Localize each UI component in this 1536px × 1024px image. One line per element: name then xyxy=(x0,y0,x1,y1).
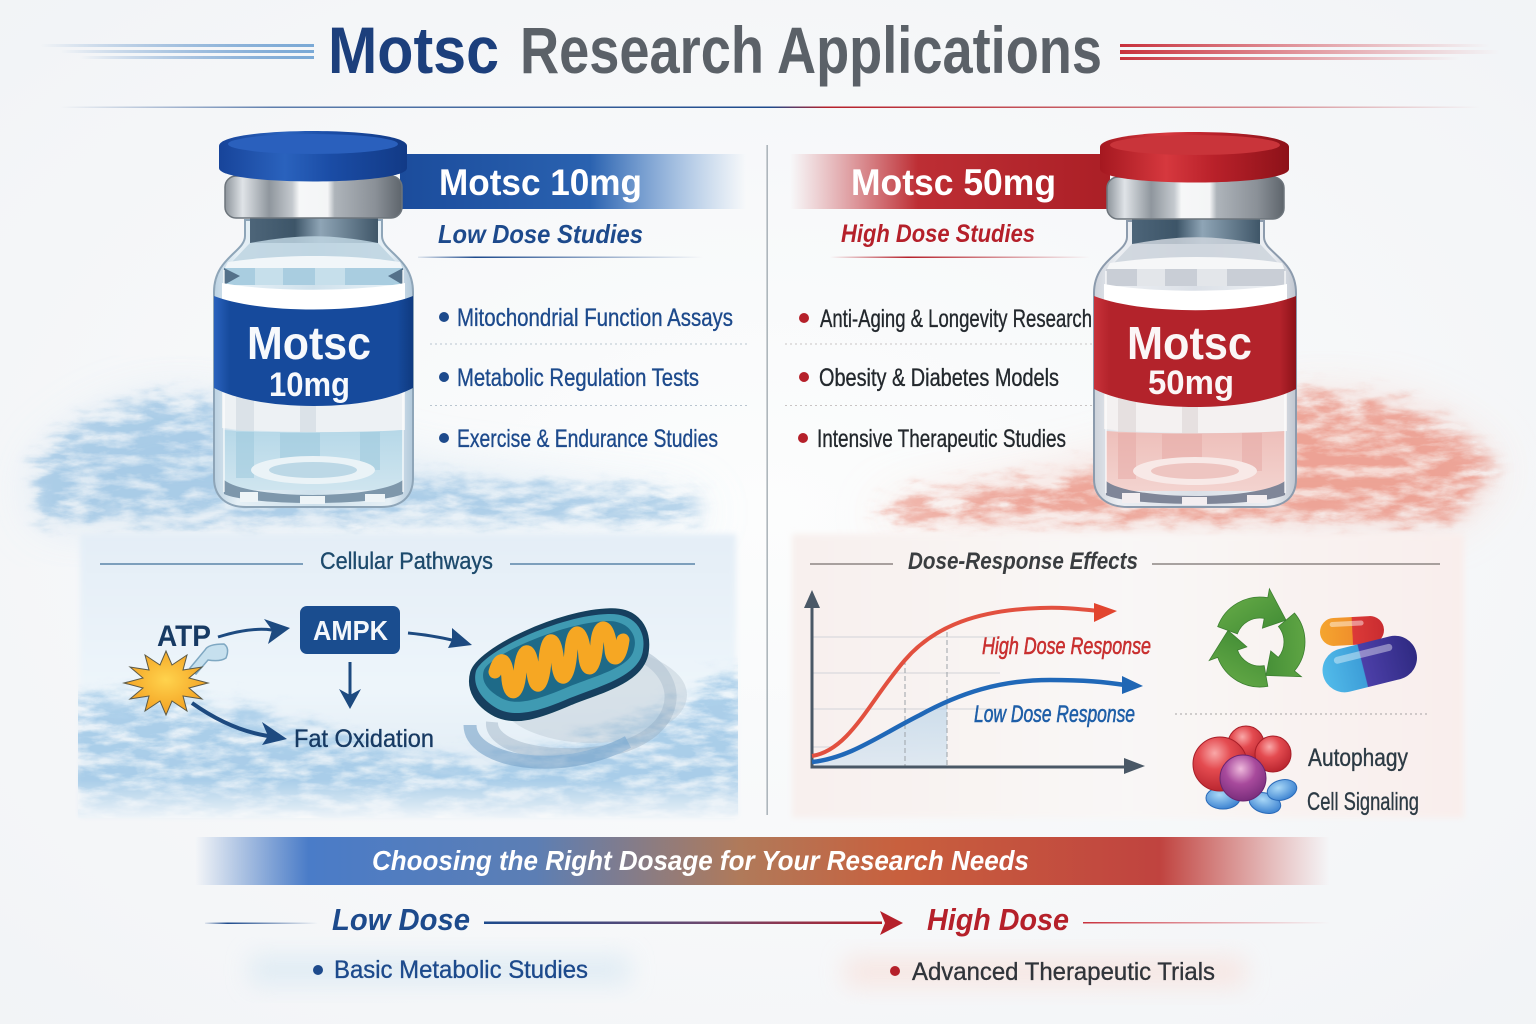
list: high dose studies: Obesity & Diabetes Models xyxy=(819,364,1059,392)
label: high dose response: High Dose Response xyxy=(982,633,1151,660)
chart: dose response curves xyxy=(804,590,1151,774)
vial: 50mg xyxy=(1094,132,1296,507)
heading: dose-response effects: Dose-Response Effects xyxy=(908,548,1138,575)
subheading: high dose: High Dose Studies xyxy=(841,220,1035,248)
axes xyxy=(804,590,1145,774)
vial glass body xyxy=(1094,221,1296,507)
vial: 10mg xyxy=(214,131,413,507)
collar xyxy=(225,176,402,218)
vial label xyxy=(214,296,413,406)
arrow: AMPK to fat oxidation xyxy=(339,662,361,709)
soft wash: red xyxy=(880,400,1495,520)
arrow: ATP to AMPK xyxy=(218,619,290,644)
shaded low-dose area xyxy=(812,702,947,766)
subheading: low dose: Low Dose Studies xyxy=(438,219,643,249)
watercolor wash: blue xyxy=(40,397,700,520)
panel: dose-response effects xyxy=(792,534,1464,818)
panel: cellular pathways xyxy=(70,534,750,830)
heading: cellular pathways: Cellular Pathways xyxy=(320,548,493,575)
label text: Motsc xyxy=(1127,317,1252,369)
banner: choosing the right dosage: Choosing the Right Dosage for Your Research Needs xyxy=(372,845,1029,876)
cap xyxy=(1100,132,1289,182)
high dose label: High Dose xyxy=(927,902,1069,937)
summary: low dose: Basic Metabolic Studies xyxy=(334,956,588,984)
collar xyxy=(1107,177,1284,219)
list: low dose studies xyxy=(430,304,748,453)
icon: recycling arrows xyxy=(1201,589,1327,705)
label: fat oxidation: Fat Oxidation xyxy=(294,725,434,753)
title xyxy=(40,13,1500,87)
box: AMPK: AMPK xyxy=(313,615,388,646)
panel wash xyxy=(70,670,750,830)
watercolor wash: red xyxy=(880,395,1500,520)
vial: 10mg: 10mg xyxy=(269,366,350,404)
dose comparison row xyxy=(205,902,1330,937)
list: high dose studies xyxy=(785,305,1095,453)
vial label xyxy=(1094,296,1296,407)
title accent lines: right xyxy=(1120,44,1500,60)
list: low dose studies: Exercise & Endurance Studies xyxy=(457,425,718,453)
label: cell signaling: Cell Signaling xyxy=(1307,788,1419,816)
cap xyxy=(219,131,407,182)
list: low dose studies: Mitochondrial Function Assays xyxy=(457,304,733,332)
header ribbon: 10mg xyxy=(400,154,746,209)
curve: high dose xyxy=(812,603,1117,756)
title accent lines: left xyxy=(40,44,314,59)
icon: ATP starburst xyxy=(124,644,228,715)
header ribbon: 50mg xyxy=(790,154,1110,209)
soft wash: blue xyxy=(40,402,700,520)
list: high dose studies: Intensive Therapeutic Studies xyxy=(817,425,1066,453)
header ribbon: 10mg: Motsc 10mg xyxy=(439,162,642,203)
vial glass body xyxy=(214,220,413,507)
mitochondrion xyxy=(470,609,648,720)
title text: Research Applications xyxy=(520,13,1102,87)
label: low dose response: Low Dose Response xyxy=(974,701,1135,728)
header ribbon: 50mg: Motsc 50mg xyxy=(851,162,1056,203)
box: AMPK xyxy=(300,606,400,654)
summary: high dose: Advanced Therapeutic Trials xyxy=(912,958,1215,986)
icon: capsules xyxy=(1318,615,1422,697)
label: ATP: ATP xyxy=(157,620,211,653)
arrow: low to high xyxy=(484,911,903,935)
label text: Motsc xyxy=(247,317,371,369)
arrow: ATP to fat oxidation xyxy=(192,703,287,745)
vial: 50mg: 50mg xyxy=(1148,364,1234,402)
banner: choosing the right dosage xyxy=(195,837,1330,885)
arrow: AMPK to mitochondrion xyxy=(408,628,472,648)
mitochondrion shadow swirl xyxy=(470,647,687,762)
summary: low dose xyxy=(250,955,630,985)
list: low dose studies: Metabolic Regulation Tests xyxy=(457,364,699,392)
icon: cell cluster xyxy=(1193,726,1299,817)
label: autophagy: Autophagy xyxy=(1308,744,1408,772)
title text: Motsc xyxy=(328,13,499,87)
list: high dose studies: Anti-Aging & Longevity Research xyxy=(820,305,1092,333)
center divider xyxy=(766,145,768,815)
low dose label: Low Dose xyxy=(332,902,470,937)
curve: low dose xyxy=(812,676,1143,762)
